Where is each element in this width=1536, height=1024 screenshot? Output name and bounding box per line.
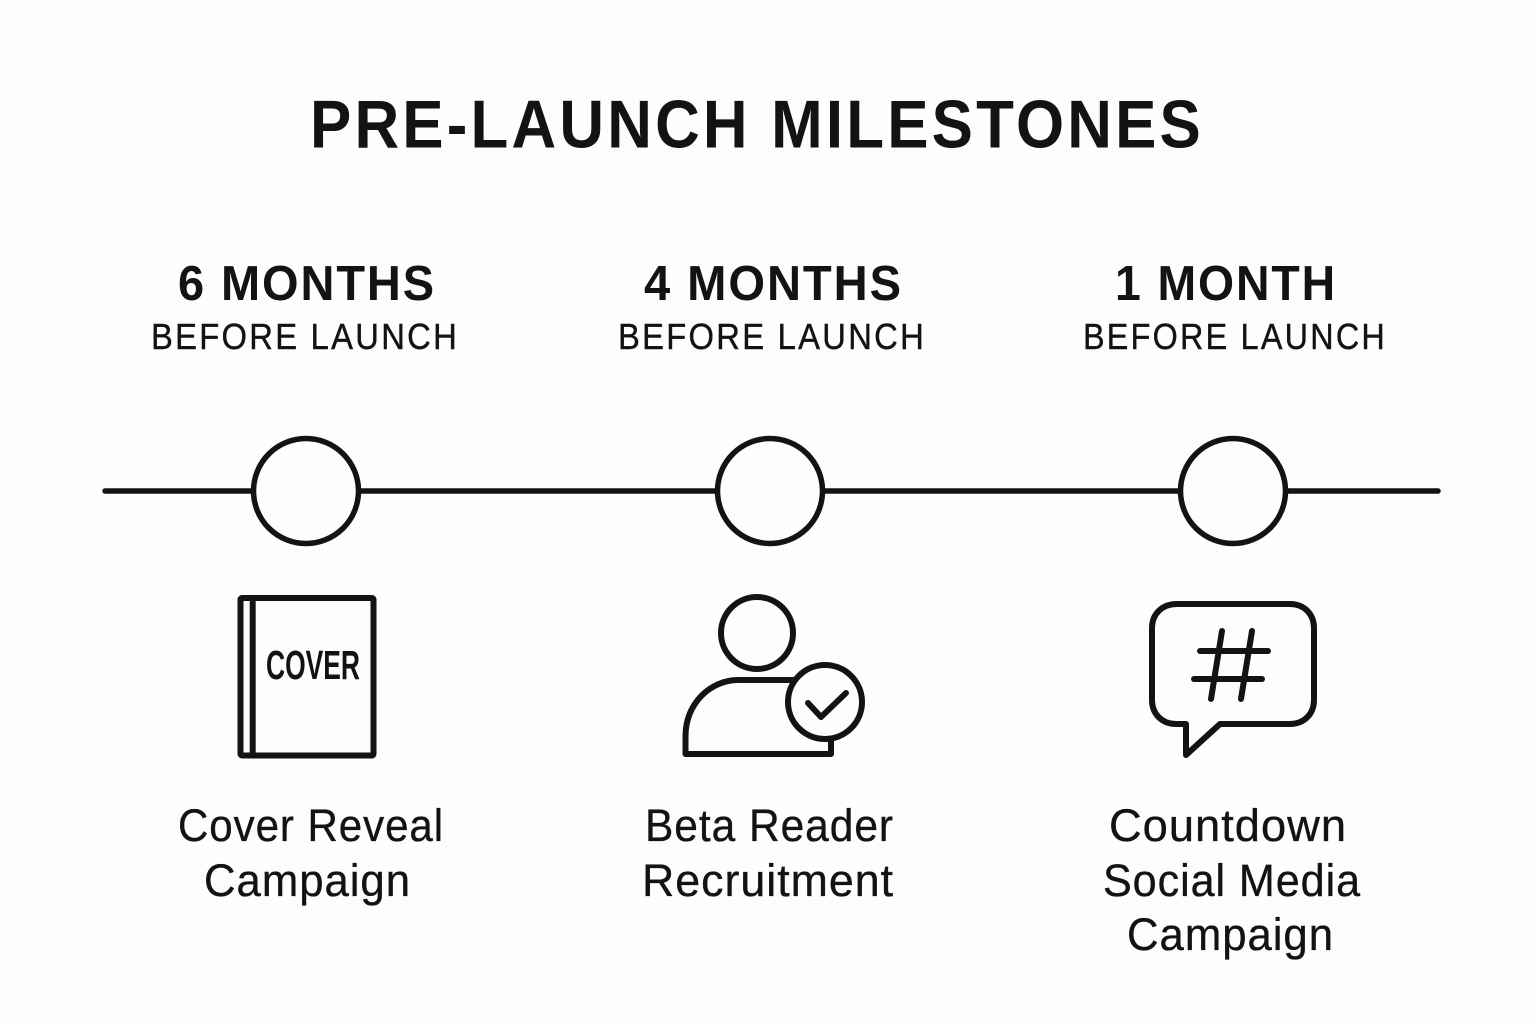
label: cover reveal campaign: Campaign [204, 855, 411, 906]
label: cover reveal campaign [178, 800, 444, 906]
milestone node: 1 month [1180, 438, 1286, 544]
label: beta reader recruitment: Beta Reader [645, 800, 894, 851]
label: countdown social media campaign: Countdown [1109, 800, 1347, 851]
icon: beta reader with check badge [686, 597, 862, 754]
milestone node: 6 months [254, 438, 358, 544]
icon: book cover [240, 598, 374, 756]
column heading: 1 month: 1 MONTH [1115, 257, 1337, 311]
column heading: 6 months: BEFORE LAUNCH [151, 316, 459, 357]
icon: hashtag speech bubble [1152, 604, 1314, 755]
label: beta reader recruitment [642, 800, 894, 906]
label: countdown social media campaign: Campaign [1127, 909, 1334, 960]
icon: book cover: COVER [266, 642, 360, 688]
column heading: 4 months [618, 257, 926, 357]
title: PRE-LAUNCH MILESTONES [310, 86, 1204, 162]
label: cover reveal campaign: Cover Reveal [178, 800, 444, 851]
column heading: 4 months: 4 MONTHS [644, 257, 903, 311]
column heading: 6 months: 6 MONTHS [178, 257, 436, 311]
milestone node: 4 months [718, 438, 822, 544]
label: beta reader recruitment: Recruitment [642, 855, 894, 906]
column heading: 6 months [151, 257, 459, 357]
label: countdown social media campaign: Social Media [1103, 855, 1361, 906]
label: countdown social media campaign [1103, 800, 1361, 960]
column heading: 4 months: BEFORE LAUNCH [618, 316, 926, 357]
timeline line [105, 488, 1438, 494]
column heading: 1 month [1083, 257, 1387, 357]
timeline [105, 438, 1438, 544]
column heading: 1 month: BEFORE LAUNCH [1083, 316, 1387, 357]
